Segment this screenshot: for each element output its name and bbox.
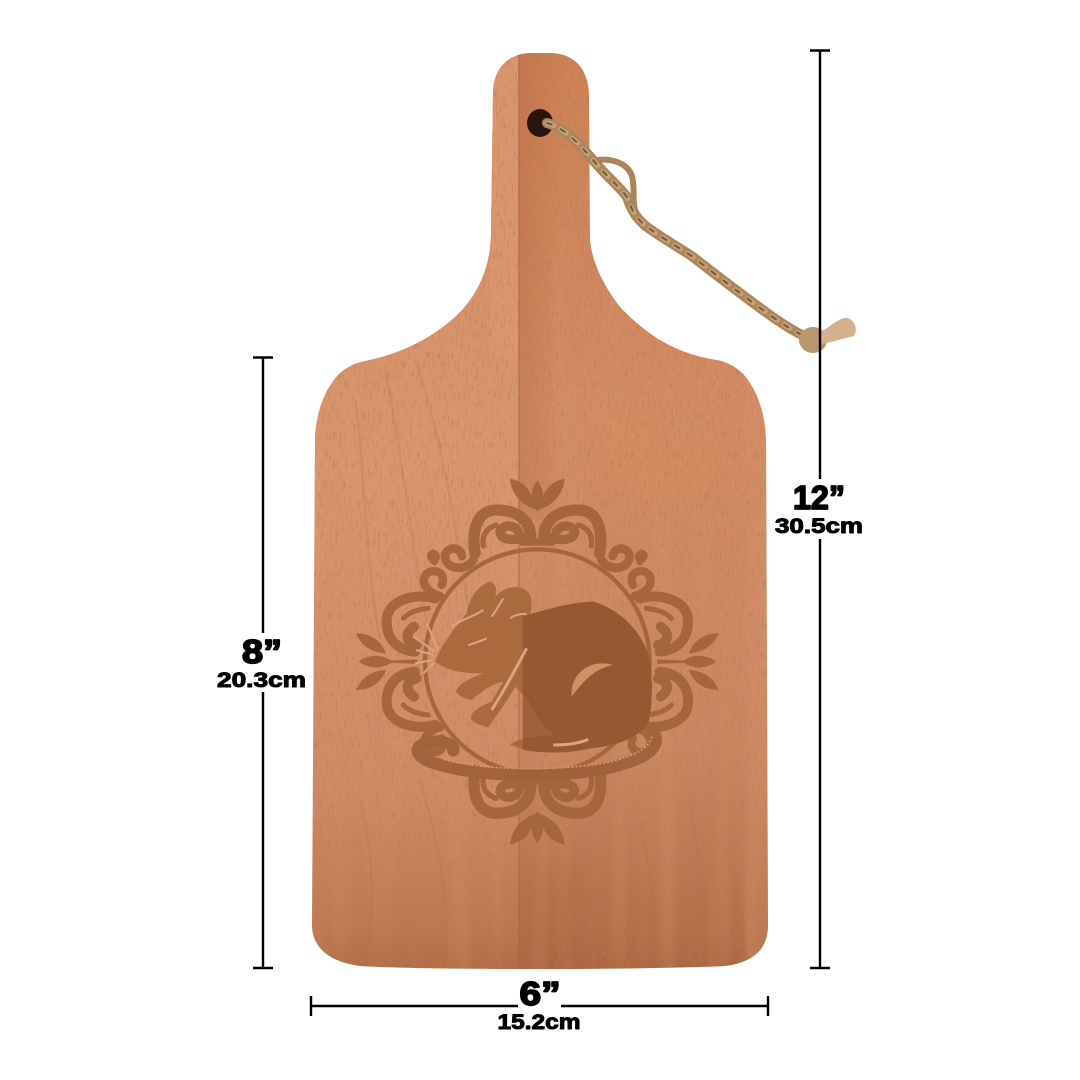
dimension: height 12 inches <box>775 50 863 968</box>
dimension: width 6 inches: 6” <box>520 975 560 1012</box>
ornamental scrolls <box>356 479 719 845</box>
rat silhouette <box>435 582 652 753</box>
wood surface <box>300 40 780 990</box>
emblem ring <box>425 549 650 774</box>
rat right side shading <box>523 602 652 752</box>
dimension: height 12 inches: 12” <box>793 479 845 516</box>
rope knot <box>799 327 827 353</box>
dimension: height 8 inches: 20.3cm <box>217 668 306 692</box>
dimension: height 8 inches <box>217 357 306 968</box>
rat fur highlight <box>572 663 613 697</box>
drill hole <box>527 109 553 137</box>
rat whiskers and pale details <box>413 598 588 745</box>
dimension: height 8 inches: 8” <box>242 633 282 670</box>
jute rope <box>547 123 856 353</box>
rat tail <box>418 728 656 775</box>
dimension: height 12 inches: 30.5cm <box>775 514 863 538</box>
rope frayed end <box>820 318 856 344</box>
dimension: width 6 inches <box>311 975 768 1034</box>
cutting board photo <box>300 40 780 990</box>
laser engraved rat emblem <box>356 479 719 845</box>
dimension: width 6 inches: 15.2cm <box>498 1010 580 1034</box>
